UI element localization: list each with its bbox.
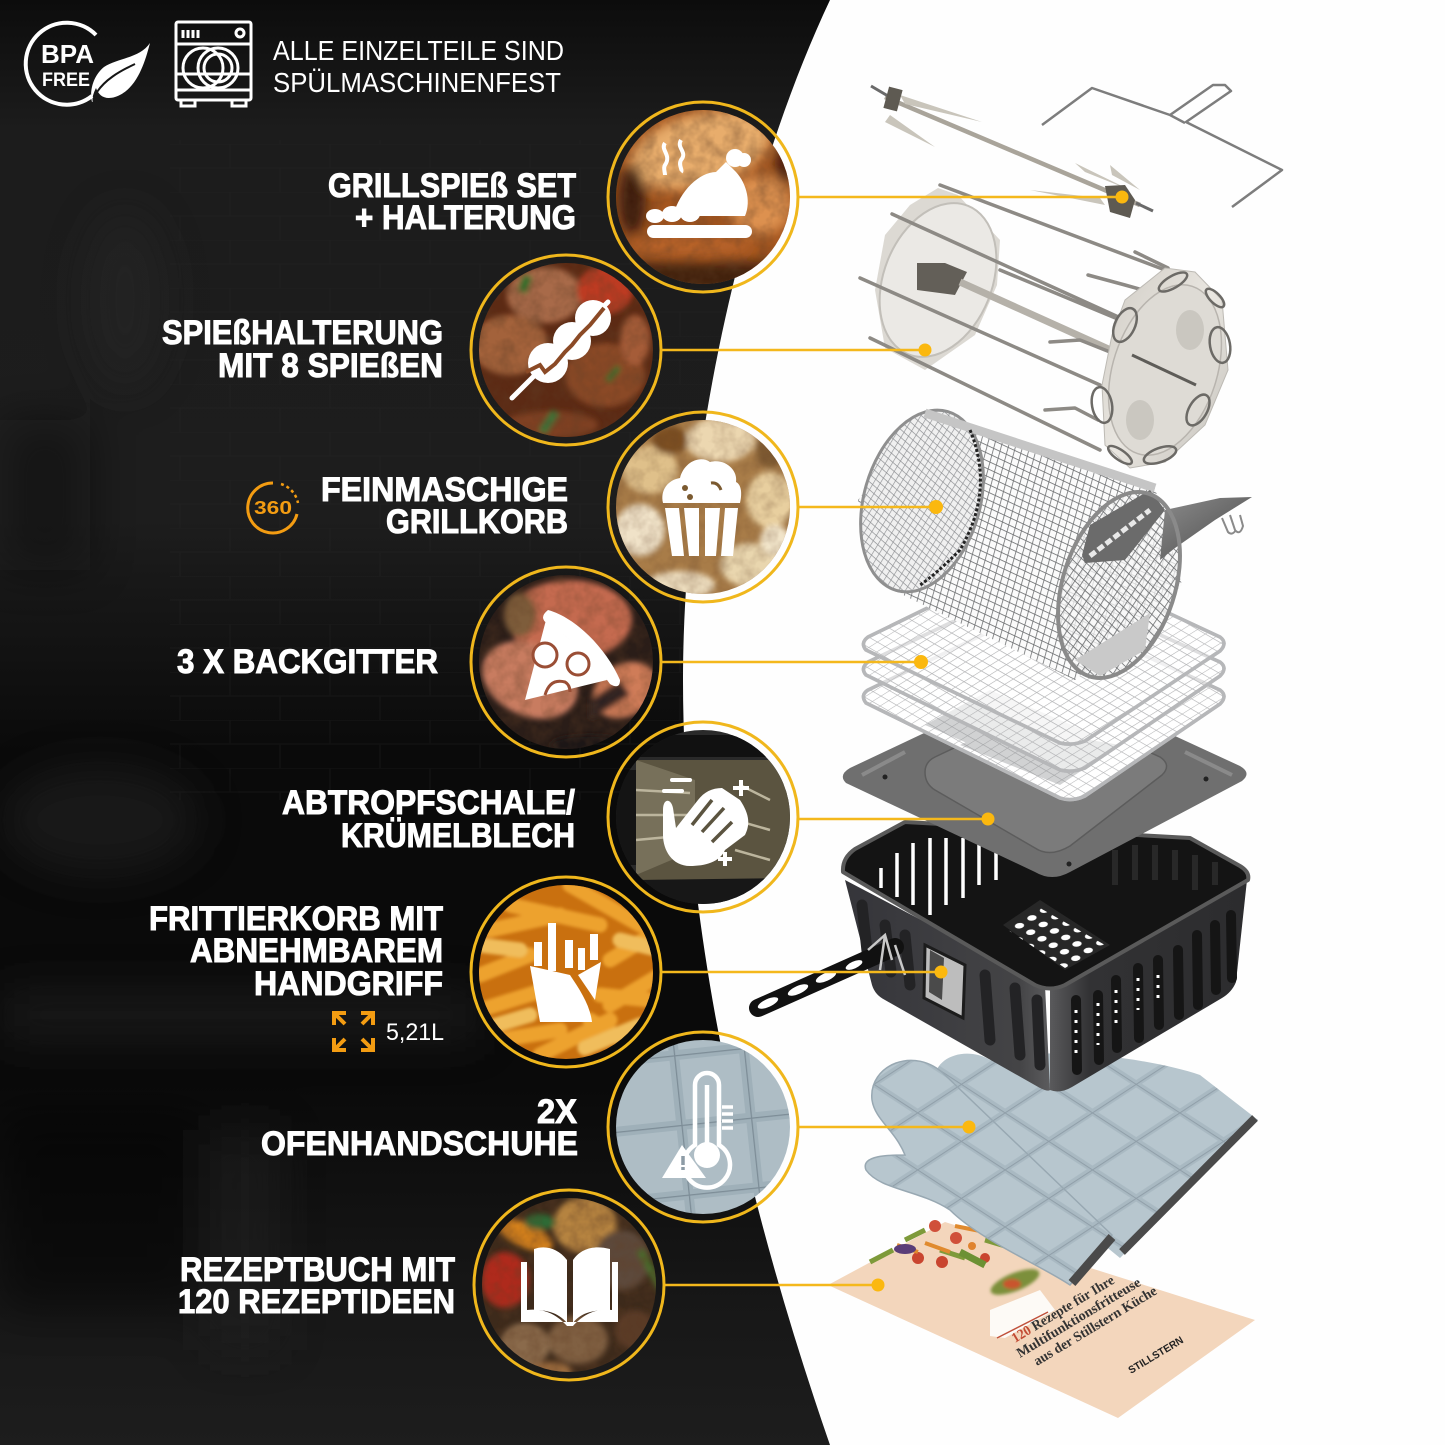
label: Ofenhandschuhe: OFENHANDSCHUHE — [261, 1125, 578, 1163]
icon: open book — [521, 1247, 618, 1326]
circle 6: french fries — [471, 877, 661, 1067]
header text: dishwasher safe — [273, 35, 564, 98]
product: spit holder wire — [1042, 85, 1282, 207]
label: Grillspieß set — [328, 167, 576, 237]
icon: BPA free with leaf — [26, 23, 150, 105]
icon: BPA free with leaf: FREE — [42, 70, 90, 91]
product: recipe book: STILLSTERN — [1126, 1334, 1186, 1377]
dark kitchen background panel — [0, 0, 840, 1445]
circle 1: roast chicken — [608, 97, 800, 292]
product: recipe book: 120 Rezepte für Ihre — [1009, 1273, 1117, 1346]
product: mesh rotisserie basket — [841, 396, 1252, 694]
label: Frittierkorb — [149, 900, 443, 1003]
label: volume 5,21L: 5,21L — [386, 1019, 444, 1046]
label: Rezeptbuch — [178, 1251, 455, 1321]
product: baking racks (3x) — [863, 556, 1224, 800]
circle 2: skewers and meat — [471, 255, 661, 445]
label: Rezeptbuch: 120 REZEPTIDEEN — [178, 1283, 455, 1321]
callout leader lines with dots — [660, 190, 1128, 1292]
icon: thermometer with warning — [662, 1073, 733, 1188]
label: Rezeptbuch: REZEPTBUCH MIT — [180, 1251, 455, 1289]
product: recipe book: aus der Stillstern Küche — [1031, 1284, 1160, 1369]
label: Spießhalterung: MIT 8 SPIEßEN — [218, 347, 443, 385]
icon: BPA free with leaf: BPA — [41, 39, 94, 69]
product: rotisserie spit — [871, 86, 1153, 218]
label: Ofenhandschuhe: 2X — [537, 1093, 577, 1131]
label: Grillkorb: FEINMASCHIGE — [321, 471, 568, 509]
label: Abtropfschale — [282, 784, 576, 855]
label: Grillkorb: GRILLKORB — [386, 503, 568, 541]
label: Ofenhandschuhe — [261, 1093, 578, 1163]
circle 8: roast vegetables and book — [474, 1190, 664, 1382]
product: rotisserie cage — [858, 185, 1242, 470]
icon: fries box — [530, 923, 601, 1022]
icon: chicken on plate — [646, 140, 752, 238]
icon: popcorn bucket — [662, 459, 741, 556]
label: Grillspieß set: + HALTERUNG — [355, 199, 576, 237]
icon: 360 rotation: 360 — [254, 498, 292, 518]
product: recipe book — [828, 1220, 1255, 1418]
label: Abtropfschale: KRÜMELBLECH — [341, 817, 575, 855]
label: Spießhalterung — [162, 314, 443, 385]
label: Grillkorb — [321, 471, 568, 541]
label: Abtropfschale: ABTROPFSCHALE/ — [282, 784, 576, 822]
circle 7: gloves and thermometer — [608, 1032, 798, 1222]
icon: skewer — [512, 300, 611, 398]
icon: 360 rotation — [248, 483, 298, 533]
product: recipe book: Multifunktionsfritteuse — [1014, 1275, 1144, 1361]
product: oven gloves — [865, 1053, 1258, 1285]
label: Frittierkorb: ABNEHMBAREM — [190, 932, 443, 970]
header text: dishwasher safe: ALLE EINZELTEILE SIND — [273, 35, 564, 66]
circle 4: pizza — [469, 567, 667, 757]
label: Spießhalterung: SPIEßHALTERUNG — [162, 314, 443, 352]
circle 5: oven cleaning — [608, 722, 800, 912]
product: drip tray — [843, 680, 1247, 877]
circle 3: popcorn — [608, 412, 800, 605]
product: fry basket with handle — [756, 822, 1248, 1091]
header text: dishwasher safe: SPÜLMASCHINENFEST — [273, 67, 561, 98]
icon: hand with cloth — [663, 780, 749, 866]
label: Frittierkorb: FRITTIERKORB MIT — [149, 900, 443, 938]
label: Grillspieß set: GRILLSPIEß SET — [328, 167, 576, 205]
label: Frittierkorb: HANDGRIFF — [254, 965, 443, 1003]
label: Backgitter: 3 X BACKGITTER — [177, 643, 438, 681]
icon: pizza slice — [525, 610, 620, 700]
icon: dishwasher — [176, 22, 251, 106]
icon: volume arrows — [334, 1013, 373, 1050]
